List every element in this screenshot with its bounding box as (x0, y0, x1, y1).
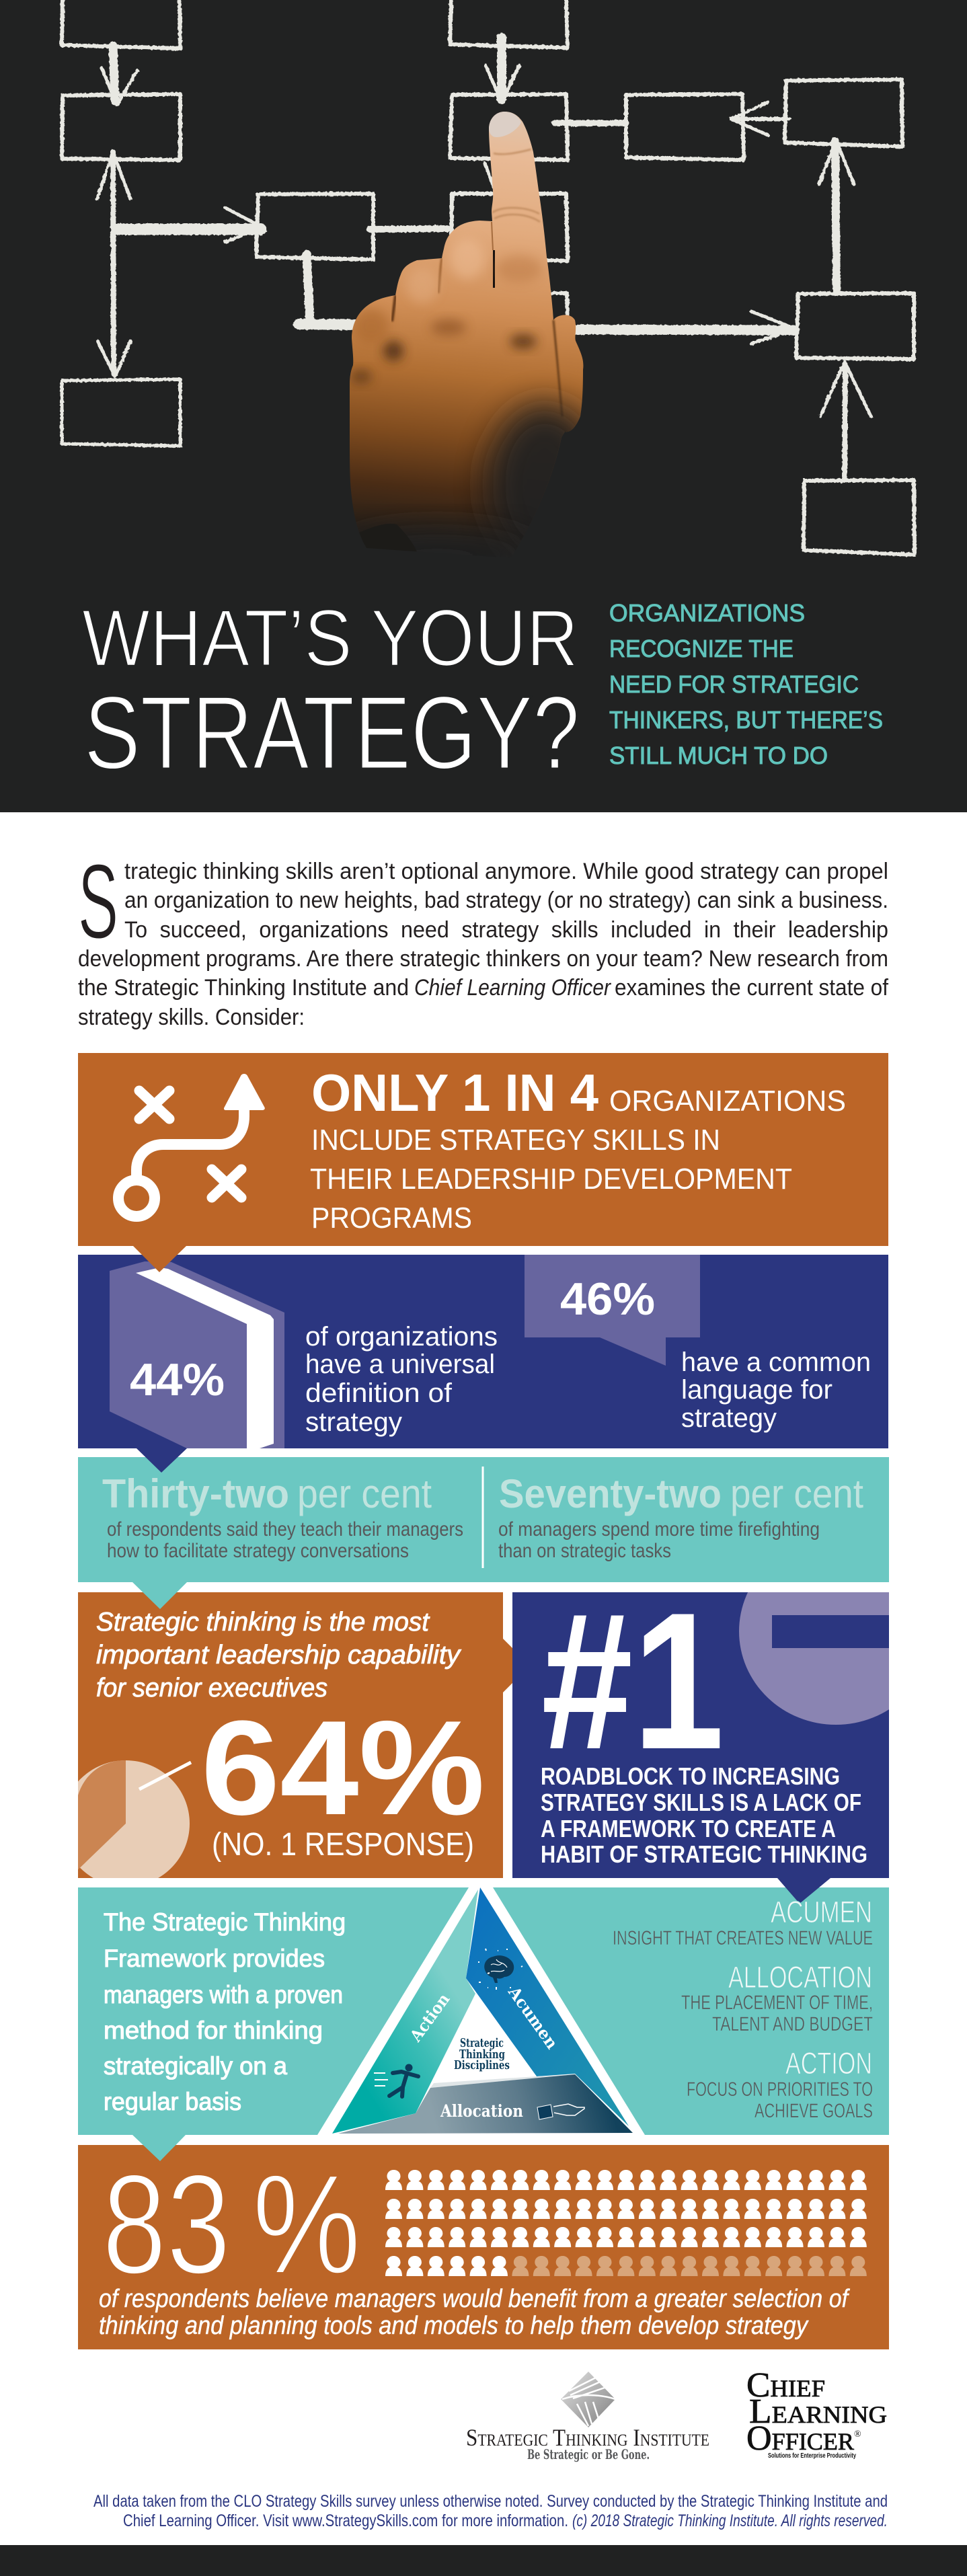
text: universal definition: have a universal (305, 1350, 495, 1379)
stat: seventy-two (498, 1471, 863, 1562)
logo: strategic thinking institute (466, 2372, 709, 2462)
no. 1 response: (NO. 1 RESPONSE) (212, 1827, 474, 1863)
intro paragraph: trategic thinking skills aren’t optional anymore. While good strategy can propel (124, 859, 888, 884)
subtitle: NEED FOR STRATEGIC (609, 670, 859, 698)
text: common language: strategy (681, 1403, 777, 1433)
definitions: THE PLACEMENT OF TIME, (681, 1992, 873, 2014)
watch strap (360, 524, 417, 551)
hand pointing photo illustration (350, 112, 584, 551)
intro paragraph: an organization to new heights, bad strategy (or no strategy) can sink a business. (124, 888, 888, 913)
pointer (132, 2135, 186, 2161)
logo: chief learning officer: ® (854, 2429, 861, 2440)
pointer (777, 1878, 830, 1904)
roadblock text: A FRAMEWORK TO CREATE A (541, 1815, 836, 1842)
logo: chief learning officer: Chief (746, 2366, 825, 2405)
text: common language: language for (681, 1375, 833, 1405)
italic statement: for senior executives (96, 1674, 327, 1703)
segment: acumen: Acumen (504, 1982, 562, 2053)
italic statement: important leadership capability (96, 1641, 462, 1670)
text: common language: have a common (681, 1348, 871, 1377)
source note (93, 2492, 888, 2530)
intro paragraph: Chief Learning Officer (414, 975, 611, 1001)
headline: INCLUDE STRATEGY SKILLS IN (311, 1124, 720, 1157)
triangle diagram (317, 1887, 645, 2135)
italic statement: thinking and planning tools and models to help them develop strategy (99, 2312, 809, 2340)
footer bar (0, 2545, 967, 2576)
right pointer (503, 1639, 530, 1692)
roadblock text (541, 1762, 867, 1868)
logo: chief learning officer: Solutions for Enterprise Productivity (768, 2452, 856, 2460)
speech bubble 46%: 46% (560, 1274, 655, 1325)
headline: PROGRAMS (311, 1202, 472, 1235)
drop cap: S (78, 843, 118, 961)
definitions: FOCUS ON PRIORITIES TO (687, 2078, 873, 2101)
segment: allocation (338, 2074, 633, 2134)
italic statement: Strategic thinking is the most (96, 1608, 430, 1637)
subtitle (609, 599, 883, 769)
title: WHAT’S YOUR (82, 593, 578, 683)
icon: brain (478, 1949, 523, 1990)
icon: hand with box (537, 2104, 584, 2119)
pie chart (78, 1760, 192, 1878)
logo: chief learning officer (746, 2366, 887, 2460)
panel: strategic thinking framework (78, 1878, 889, 2135)
framework text: Framework provides (104, 1945, 325, 1972)
logo: strategic thinking institute: Be Strategic or Be Gone. (527, 2446, 650, 2462)
text: universal definition: definition of (305, 1378, 453, 1408)
icon: play diagram (118, 1074, 265, 1216)
intro paragraph: development programs. Are there strategic thinkers on your team? New research from (78, 946, 888, 972)
logo: chief learning officer: Learning (749, 2392, 887, 2431)
headline: ORGANIZATIONS (609, 1085, 846, 1118)
framework text (104, 1908, 346, 2115)
stat: seventy-two: than on strategic tasks (498, 1540, 671, 1562)
segment: action: Action (405, 1990, 453, 2045)
definitions: ALLOCATION (728, 1960, 872, 1994)
people pictogram (385, 2170, 867, 2276)
text: universal definition (305, 1322, 498, 1437)
stat: thirty-two (102, 1471, 463, 1562)
roadblock text: HABIT OF STRATEGIC THINKING (541, 1840, 867, 1868)
83%: % (252, 2144, 361, 2304)
framework text: managers with a proven (104, 1981, 343, 2008)
panel: 83 percent (78, 2135, 889, 2349)
subtitle: RECOGNIZE THE (609, 635, 794, 662)
panel: only 1 in 4 (78, 1053, 888, 1246)
chalk flowchart diagram (62, 0, 915, 555)
definitions: ACHIEVE GOALS (755, 2100, 873, 2122)
intro paragraph: examines the current state of (615, 975, 889, 1001)
icon: book with 44% (110, 1261, 284, 1448)
intro paragraph: strategy skills. Consider: (78, 1005, 305, 1030)
segment: center disciplines (430, 1994, 575, 2088)
icon: target shape (739, 1592, 889, 1725)
title (82, 593, 580, 791)
text: universal definition: strategy (305, 1407, 402, 1437)
definitions: ACUMEN (771, 1895, 872, 1929)
panel: #1 roadblock (512, 1592, 889, 1878)
source note: Chief Learning Officer. Visit www.StrategySkills.com for more information. (123, 2511, 568, 2530)
title: STRATEGY? (84, 674, 580, 791)
subtitle: THINKERS, BUT THERE’S (609, 706, 883, 734)
logo: chief learning officer: Officer (746, 2419, 854, 2458)
segment: center disciplines: Disciplines (454, 2058, 510, 2072)
stat: seventy-two: Seventy-two (499, 1471, 722, 1516)
roadblock text: STRATEGY SKILLS IS A LACK OF (541, 1789, 861, 1816)
stat: thirty-two: Thirty-two (102, 1471, 289, 1516)
pointer (137, 1448, 187, 1473)
segment: action (332, 1889, 478, 2134)
text: universal definition: of organizations (305, 1322, 498, 1352)
stat: thirty-two: per cent (297, 1471, 432, 1516)
stat: thirty-two: of respondents said they teach their managers (107, 1518, 463, 1540)
framework text: regular basis (104, 2088, 241, 2115)
headline (310, 1063, 846, 1235)
stat: seventy-two: of managers spend more time firefighting (498, 1518, 820, 1540)
headline: THEIR LEADERSHIP DEVELOPMENT (310, 1163, 792, 1196)
headline: ONLY 1 IN 4 (311, 1063, 598, 1122)
segment: center disciplines: Strategic (460, 2036, 504, 2050)
83% (102, 2144, 361, 2304)
speech bubble 46% (525, 1255, 700, 1366)
italic statement (99, 2285, 850, 2340)
definitions: INSIGHT THAT CREATES NEW VALUE (613, 1927, 873, 1949)
logo: strategic thinking institute: Strategic Thinking Institute (466, 2424, 709, 2451)
hero panel (0, 0, 967, 812)
panel: 64 percent (62, 1582, 530, 1887)
intro paragraph (78, 843, 889, 1030)
framework text: method for thinking (104, 2017, 323, 2044)
finger nail (489, 112, 521, 137)
text: common language (681, 1348, 871, 1433)
stat: seventy-two: per cent (730, 1471, 863, 1516)
italic statement (96, 1608, 462, 1703)
panel: definition and language (78, 1246, 888, 1448)
definitions: ACTION (785, 2046, 872, 2080)
icon: book with 44%: 44% (130, 1354, 225, 1405)
framework text: strategically on a (104, 2052, 287, 2080)
83%: 83 (102, 2144, 231, 2304)
italic statement: of respondents believe managers would benefit from a greater selection of (99, 2285, 850, 2313)
intro paragraph: To succeed, organizations need strategy skills included in their leadership (124, 917, 888, 943)
stat: thirty-two: how to facilitate strategy conversations (107, 1540, 409, 1562)
#1: #1 (541, 1572, 724, 1790)
64%: 64% (201, 1693, 485, 1843)
panel: thirty-two and seventy-two per cent (78, 1448, 889, 1582)
pointer (133, 1246, 186, 1272)
pointer (132, 1582, 187, 1609)
segment: acumen (466, 1887, 629, 2126)
segment: center disciplines: Thinking (459, 2047, 505, 2062)
subtitle: STILL MUCH TO DO (609, 742, 828, 769)
subtitle: ORGANIZATIONS (609, 599, 805, 627)
framework text: The Strategic Thinking (104, 1908, 346, 1936)
segment: allocation: Allocation (440, 2101, 523, 2121)
definitions (613, 1895, 873, 2122)
roadblock text: ROADBLOCK TO INCREASING (541, 1762, 840, 1790)
intro paragraph: the Strategic Thinking Institute and (78, 975, 409, 1001)
diamond mark (561, 2372, 615, 2427)
icon: runner (374, 2064, 418, 2097)
definitions: TALENT AND BUDGET (712, 2013, 873, 2035)
